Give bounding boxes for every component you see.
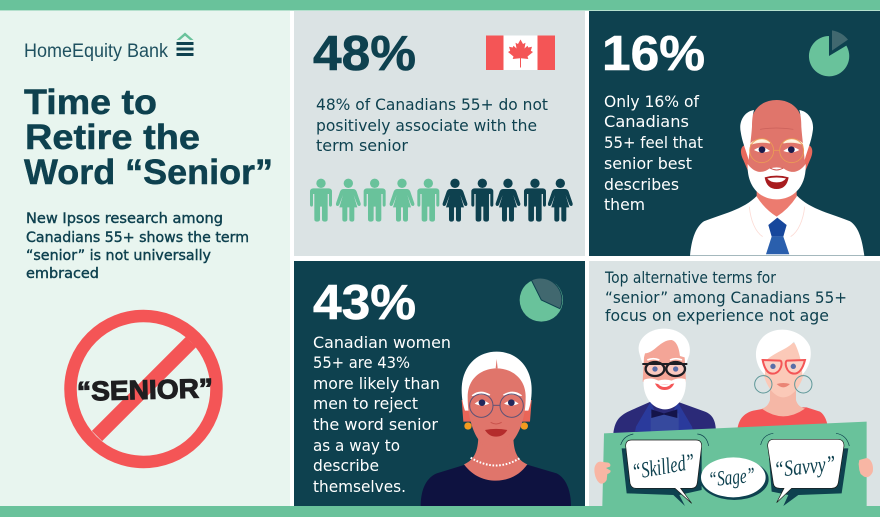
description [316, 95, 548, 155]
illustration: older man [690, 100, 864, 256]
heading: Top alternative terms for [604, 268, 776, 287]
description: describes [604, 175, 679, 194]
panel: 43 percent [294, 261, 585, 506]
people icons [310, 179, 573, 222]
description: Only 16% of [604, 92, 699, 111]
stat 48%: 48% [313, 27, 416, 81]
description: them [604, 195, 645, 214]
description: as a way to [313, 436, 400, 455]
panel: 16 percent [589, 11, 880, 256]
illustration: woman with red glasses [737, 330, 828, 430]
description: term senior [316, 136, 408, 155]
subtitle text: Canadians 55+ shows the term [26, 230, 249, 246]
description: the word senior [313, 415, 438, 434]
description [313, 333, 451, 496]
bubble: Savvy: “Savvy” [773, 451, 837, 482]
description: positively associate with the [316, 116, 537, 135]
panel: intro [0, 11, 290, 506]
description: describe [313, 456, 379, 475]
description: Canadians [604, 112, 689, 131]
right hand [859, 458, 873, 477]
subtitle text: New Ipsos research among [26, 211, 223, 227]
bottom green band [0, 506, 880, 517]
pie chart 16 percent [809, 30, 849, 76]
sign with speech bubbles [590, 422, 879, 517]
logo: HomeEquity Bank: HomeEquity Bank [24, 41, 168, 62]
description: 48% of Canadians 55+ do not [316, 95, 548, 114]
illustration: bearded man [613, 329, 716, 433]
bubble: Savvy [761, 433, 849, 506]
description: Canadian women [313, 333, 451, 352]
description: 55+ are 43% [313, 353, 410, 372]
title: Word “Senior” [24, 152, 273, 192]
bubble: Sage: “Sage” [707, 463, 756, 492]
stat 43%: 43% [313, 276, 416, 330]
description: men to reject [313, 394, 418, 413]
logo: HomeEquity Bank [24, 32, 194, 62]
title: Retire the [25, 117, 200, 157]
icon: Canadian flag [486, 36, 555, 70]
panel: alternative terms [589, 261, 880, 517]
pie chart 43 percent [520, 278, 563, 322]
description: themselves. [313, 477, 406, 496]
heading: focus on experience not age [605, 306, 829, 325]
description [604, 92, 703, 214]
bubble: Skilled [621, 434, 709, 506]
illustration: older woman [421, 352, 571, 506]
title: Time to [24, 82, 157, 122]
icon: prohibited senior sign: “SENIOR” [77, 373, 213, 407]
icon: prohibited senior sign [70, 316, 216, 462]
subtitle text: embraced [26, 266, 99, 282]
top green band [0, 0, 880, 10]
subtitle text [26, 211, 249, 282]
left hand [594, 462, 611, 484]
title [24, 82, 273, 192]
description: 55+ feel that [604, 133, 703, 152]
subtitle text: “senior” is not universally [26, 248, 211, 264]
stat 16%: 16% [602, 27, 705, 81]
heading: “senior” among Canadians 55+ [605, 288, 847, 307]
description: senior best [604, 154, 692, 173]
bubble: Sage [700, 457, 769, 500]
bubble: Skilled: “Skilled” [630, 449, 697, 484]
panel: 48 percent [294, 11, 585, 256]
heading [604, 268, 847, 325]
description: more likely than [313, 374, 440, 393]
